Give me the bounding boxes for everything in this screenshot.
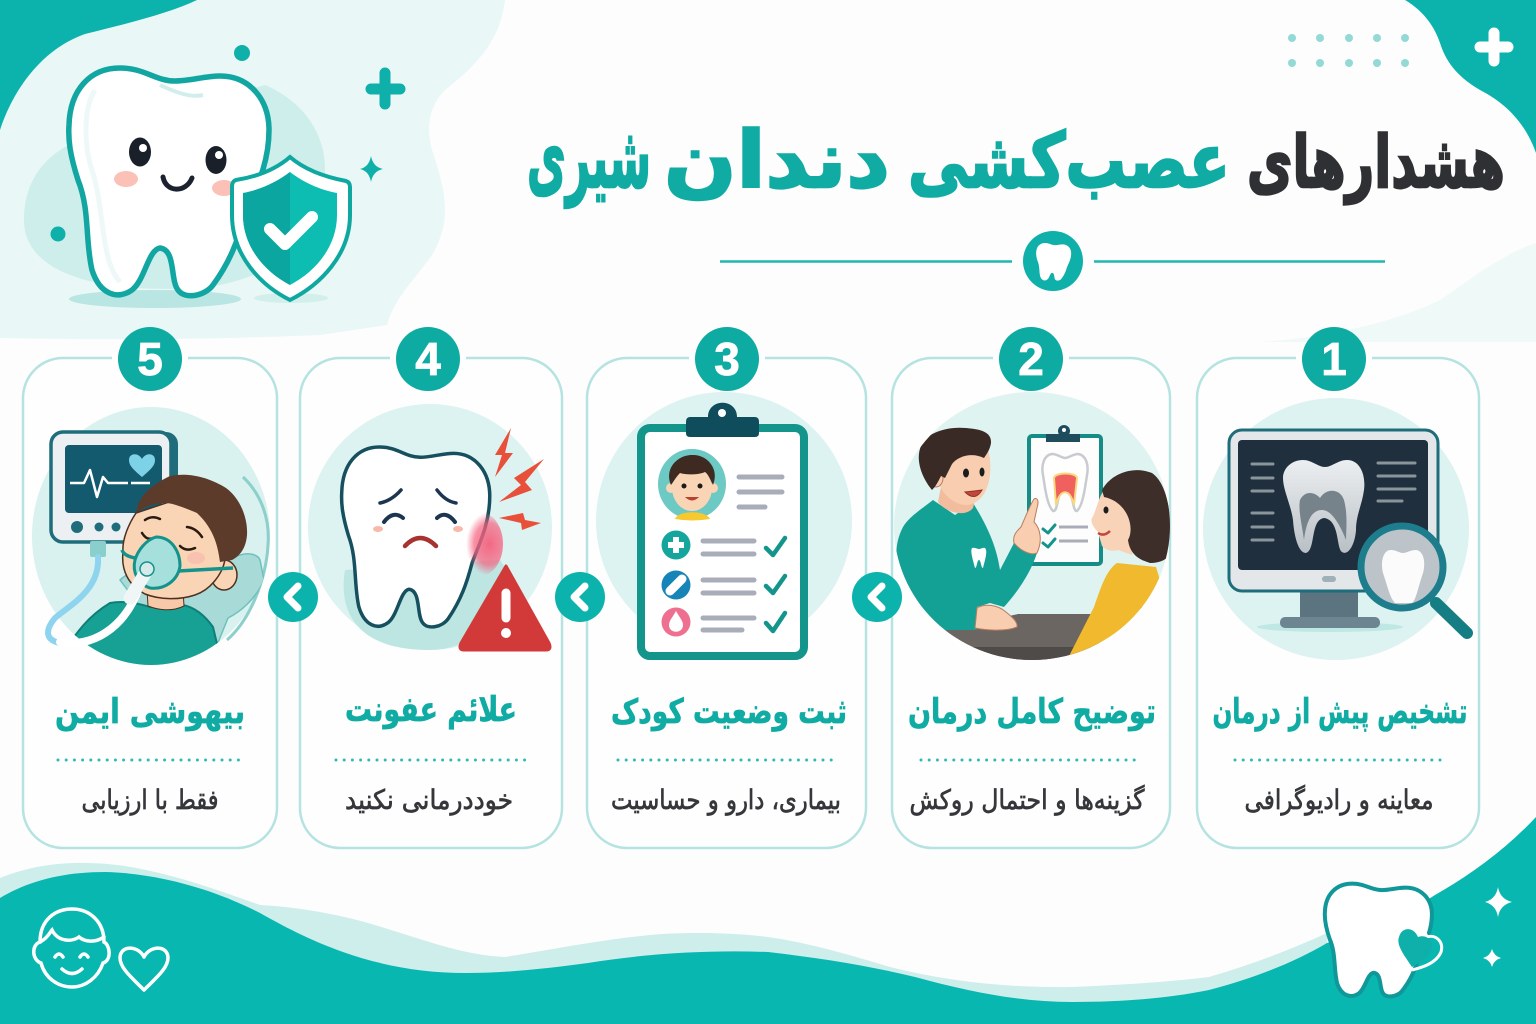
step 2 description: گزینه‌ها و احتمال روکش <box>910 784 1145 816</box>
step 3 heading: ثبت وضعیت کودک <box>611 692 847 732</box>
parent <box>1067 470 1173 660</box>
step 2 heading: توضیح کامل درمان <box>908 692 1156 732</box>
step 4 number badge: 4 <box>415 333 441 385</box>
step 4 heading: علائم عفونت <box>345 690 517 730</box>
step 5 description: فقط با ارزیابی <box>82 785 218 816</box>
illustration: dentist explaining to parent <box>894 392 1174 667</box>
anesthesia mask and tube <box>60 537 233 643</box>
arrow: step 3 to 4 <box>555 572 605 622</box>
panel: step 5 <box>23 327 277 848</box>
background: bottom waves <box>0 817 1536 1024</box>
illustration: monitor x-ray and magnifier <box>1203 398 1469 660</box>
panel: step 4 <box>300 327 562 848</box>
step 5 number badge <box>112 327 188 391</box>
dot grid decoration <box>1288 34 1409 67</box>
step 1 number badge: 1 <box>1321 333 1347 385</box>
warning triangle <box>460 566 550 650</box>
title divider with tooth icon <box>720 231 1385 291</box>
illustration: smiling tooth with shield <box>24 45 400 308</box>
sparkles: footer <box>1483 887 1512 967</box>
step 3 number badge: 3 <box>714 333 740 385</box>
icon: plus top right <box>1480 33 1508 61</box>
step 2 number badge <box>993 327 1069 391</box>
child avatar <box>658 449 726 520</box>
step 5 number badge: 5 <box>137 333 163 385</box>
step 5 heading: بیهوشی ایمن <box>55 692 245 732</box>
title: عصب‌کشی <box>908 116 1230 205</box>
illustration: footer tooth with heart <box>1325 884 1442 996</box>
illustration: sad tooth with infection <box>308 404 552 650</box>
dentist <box>896 428 1040 630</box>
panel: step 3 <box>587 327 866 848</box>
icon: heart outline <box>120 948 168 990</box>
step 1 description: معاینه و رادیوگرافی <box>1244 784 1434 816</box>
panel: step 1 <box>1197 327 1479 848</box>
arrow: step 4 to 5 <box>268 572 318 622</box>
title: دندان <box>664 116 890 206</box>
title: شیری <box>527 108 651 208</box>
background: top right blob <box>1260 0 1536 342</box>
step 3 description: بیماری، دارو و حساسیت <box>611 785 841 816</box>
child head <box>123 475 247 610</box>
background: top left blobs <box>0 0 505 339</box>
illustration: child record clipboard <box>596 392 852 656</box>
step 4 description: خوددرمانی نکنید <box>345 785 513 816</box>
step 4 number badge <box>390 327 466 391</box>
step 3 number badge <box>689 327 765 391</box>
arrow: step 2 to 3 <box>852 572 902 622</box>
step 2 number badge: 2 <box>1018 333 1044 385</box>
title <box>527 108 1505 208</box>
illustration: child under safe anesthesia <box>32 407 270 672</box>
step 1 number badge <box>1296 327 1372 391</box>
icon: boy face <box>34 909 109 987</box>
panel: step 2 <box>892 327 1174 848</box>
